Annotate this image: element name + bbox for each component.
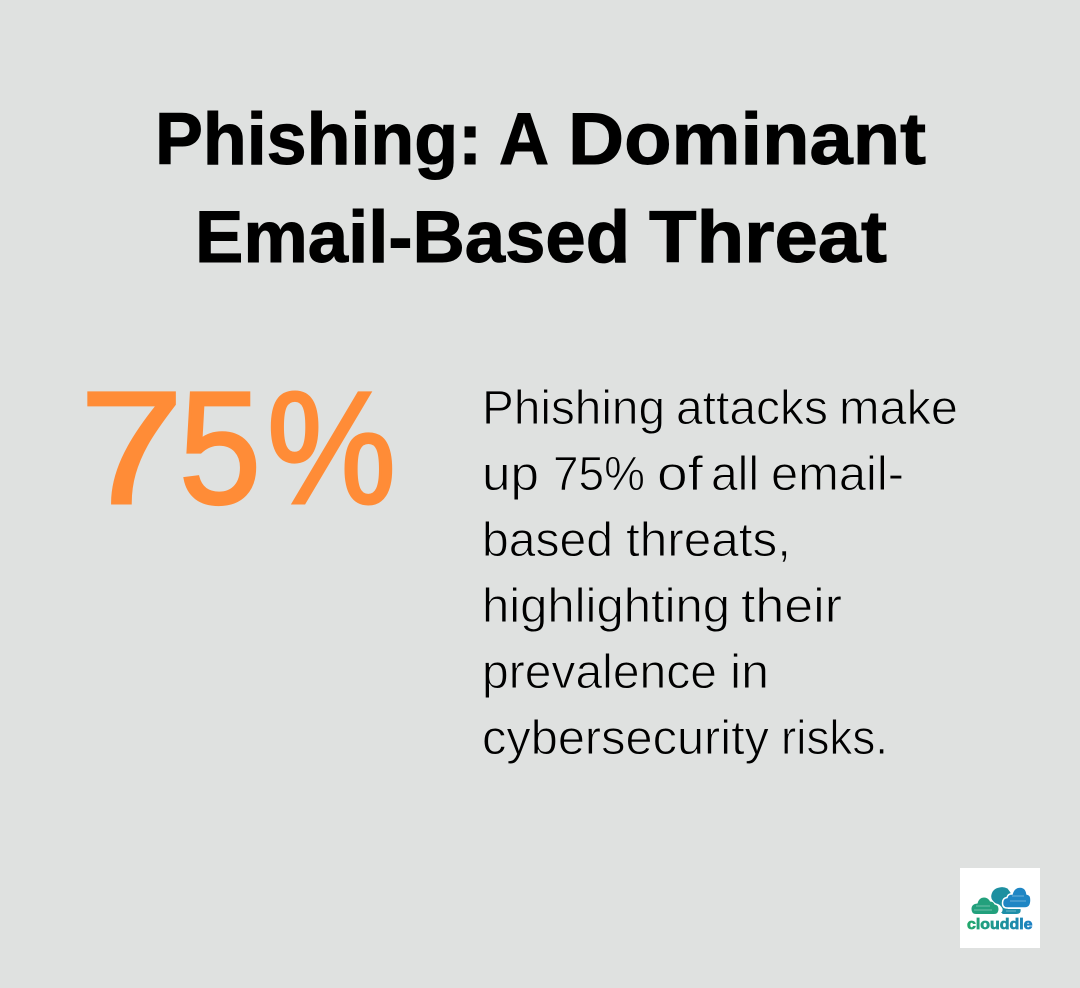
- icon: circuit lines: [974, 896, 1026, 911]
- big stat: 75%: %: [267, 358, 396, 537]
- icon: left cloud: [972, 898, 998, 914]
- description text: their: [741, 580, 842, 633]
- description text: prevalence: [482, 646, 717, 699]
- description text: based: [482, 514, 613, 567]
- description text: in: [730, 646, 769, 699]
- logo: clouddle: [960, 868, 1040, 948]
- description text: all: [711, 448, 759, 501]
- title: [155, 99, 926, 278]
- title: Dominant: [568, 99, 926, 180]
- description text: cybersecurity: [482, 712, 769, 765]
- title: Phishing:: [155, 99, 482, 180]
- icon: back cloud: [991, 887, 1014, 913]
- icon: lower cloud tail: [1002, 909, 1021, 914]
- logo wordmark: clouddle: [967, 916, 1032, 933]
- description text: threats,: [626, 514, 791, 567]
- description text: 75%: [553, 448, 645, 501]
- description text: make: [839, 382, 958, 435]
- description text: risks.: [781, 712, 888, 765]
- big stat: 75%: 7: [80, 358, 184, 537]
- description text: email-: [771, 448, 904, 501]
- title: Email-Based: [195, 197, 630, 278]
- description text: Phishing: [482, 382, 665, 435]
- description text: [482, 382, 958, 765]
- icon: front cloud: [1002, 887, 1031, 908]
- title: Threat: [649, 197, 887, 278]
- title: A: [499, 99, 549, 180]
- description text: up: [482, 448, 539, 501]
- big stat: 75%: 5: [179, 358, 261, 537]
- description text: highlighting: [482, 580, 730, 633]
- big stat: 75%: [80, 358, 396, 537]
- description text: of: [657, 448, 704, 501]
- description text: attacks: [676, 382, 828, 435]
